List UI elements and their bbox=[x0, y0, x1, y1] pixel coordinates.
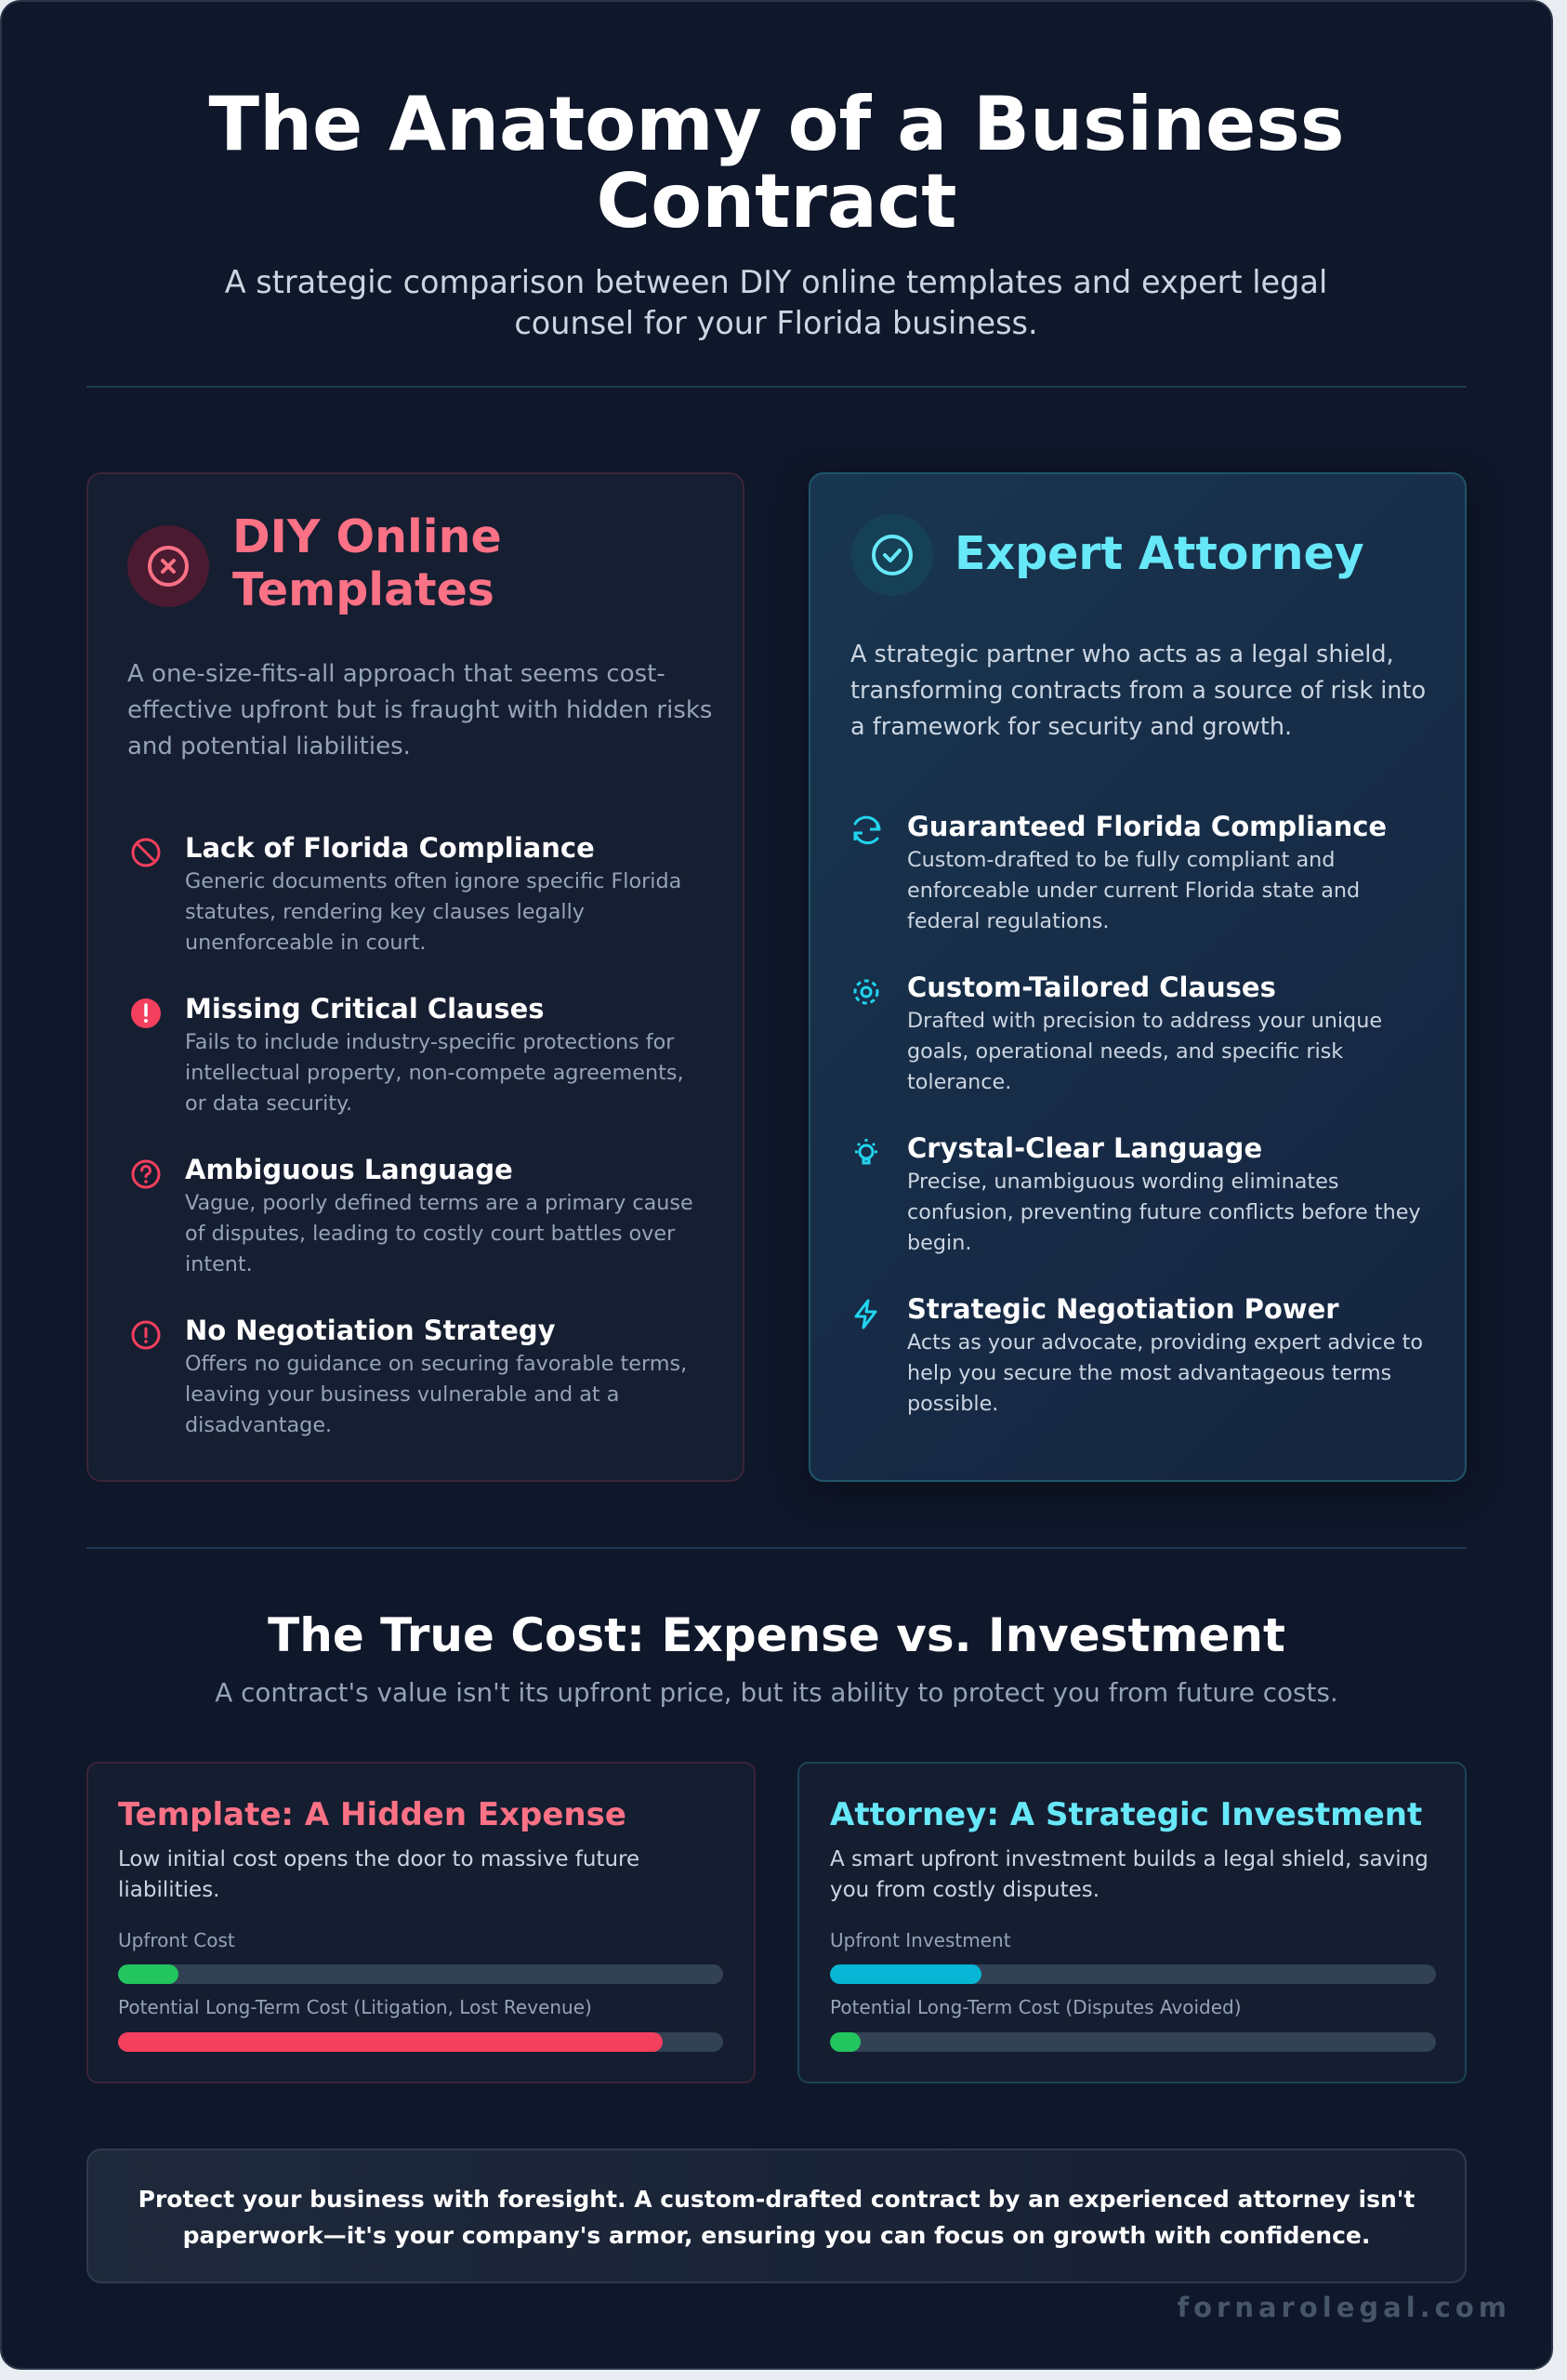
title: The Anatomy of a Business bbox=[209, 81, 1344, 167]
heading: attorney investment: Attorney: A Strategic Investment bbox=[830, 1796, 1422, 1833]
icon: bulb bbox=[855, 1139, 877, 1164]
callout: Protect your business with foresight. A custom-drafted contract by an experienced attorney isn't bbox=[138, 2186, 1415, 2213]
item: lack of compliance: Lack of Florida Compliance bbox=[185, 832, 595, 864]
section title: true cost: The True Cost: Expense vs. Investment bbox=[268, 1608, 1285, 1662]
item: ambiguous bbox=[185, 1154, 693, 1276]
heading: DIY: Templates bbox=[232, 563, 494, 616]
item: custom clauses: Custom-Tailored Clauses bbox=[907, 972, 1276, 1003]
footer: brand: fornarolegal.com bbox=[1177, 2292, 1511, 2323]
item: guaranteed compliance: Guaranteed Florida Compliance bbox=[907, 811, 1387, 842]
title bbox=[208, 81, 1344, 245]
item: custom clauses: Drafted with precision to address your unique goals, operational needs, and specific risk tolerance. bbox=[907, 1009, 1382, 1094]
icon: check circle bbox=[851, 514, 933, 596]
icon: refresh bbox=[853, 816, 881, 844]
item: clear language: Crystal-Clear Language bbox=[907, 1132, 1262, 1164]
item: guaranteed compliance: Custom-drafted to be fully compliant and enforceable under current Florida state and federal regulations. bbox=[907, 848, 1360, 933]
item: clear language: Precise, unambiguous wording eliminates confusion, preventing future conflicts before they begin. bbox=[907, 1170, 1421, 1255]
item: guaranteed compliance bbox=[907, 811, 1387, 933]
heading: DIY bbox=[232, 510, 502, 616]
card: template expense bbox=[86, 1762, 756, 2083]
item: custom clauses bbox=[907, 972, 1382, 1094]
heading: DIY: DIY Online bbox=[232, 510, 502, 563]
subtitle bbox=[225, 264, 1327, 341]
text: expert description: A strategic partner who acts as a legal shield, transforming contracts from a source of risk into a framework for security and growth. bbox=[850, 641, 1426, 741]
text: Low initial cost opens the door to massive future liabilities. bbox=[118, 1847, 639, 1902]
text: DIY description: A one-size-fits-all approach that seems cost-effective upfront but is fraught with hidden risks and potential liabilities. bbox=[127, 660, 712, 760]
subtitle: A strategic comparison between DIY online templates and expert legal bbox=[225, 264, 1327, 300]
subtitle: counsel for your Florida business. bbox=[514, 305, 1038, 341]
panel: expert attorney bbox=[809, 472, 1467, 1482]
card: attorney investment bbox=[797, 1762, 1467, 2083]
item: lack of compliance: Generic documents often ignore specific Florida statutes, rendering key clauses legally unenforceable in court. bbox=[185, 869, 681, 955]
panel: DIY templates bbox=[86, 472, 744, 1482]
item: no negotiation: Offers no guidance on securing favorable terms, leaving your business vulnerable and at a disadvantage. bbox=[185, 1352, 687, 1437]
text: A smart upfront investment builds a legal shield, saving you from costly disputes. bbox=[830, 1847, 1429, 1902]
item: missing clauses: Fails to include industry-specific protections for intellectual property, non-compete agreements, or data security. bbox=[185, 1030, 684, 1116]
item: no negotiation: No Negotiation Strategy bbox=[185, 1315, 556, 1346]
section subtitle: A contract's value isn't its upfront price, but its ability to protect you from future costs. bbox=[215, 1677, 1338, 1708]
icon: alert filled bbox=[131, 998, 161, 1028]
icon: ban bbox=[132, 839, 160, 866]
icon: bolt bbox=[854, 1300, 877, 1329]
item: negotiation power: Acts as your advocate, providing expert advice to help you secure the most advantageous terms possible. bbox=[907, 1330, 1423, 1416]
bar: long-term cost: Potential Long-Term Cost (Litigation, Lost Revenue) bbox=[118, 1996, 592, 2018]
heading: expert: Expert Attorney bbox=[955, 527, 1364, 580]
bar: upfront investment: Upfront Investment bbox=[830, 1929, 1011, 1951]
icon: question bbox=[132, 1160, 160, 1188]
item: lack of compliance bbox=[185, 832, 681, 955]
bar: disputes avoided: Potential Long-Term Cost (Disputes Avoided) bbox=[830, 1996, 1242, 2018]
title: Contract bbox=[597, 158, 956, 245]
heading: template expense: Template: A Hidden Expense bbox=[118, 1796, 626, 1833]
item: negotiation power: Strategic Negotiation Power bbox=[907, 1293, 1339, 1325]
callout: paperwork—it's your company's armor, ensuring you can focus on growth with confidence. bbox=[183, 2222, 1370, 2249]
item: clear language bbox=[907, 1132, 1421, 1255]
item: missing clauses bbox=[185, 993, 684, 1116]
icon: alert outline bbox=[132, 1320, 160, 1350]
item: ambiguous: Vague, poorly defined terms are a primary cause of disputes, leading to costly court battles over intent. bbox=[185, 1191, 693, 1276]
icon: x circle bbox=[127, 525, 209, 607]
icon: gear bbox=[853, 980, 879, 1004]
callout bbox=[86, 2149, 1467, 2283]
item: missing clauses: Missing Critical Clauses bbox=[185, 993, 545, 1025]
bar: upfront cost: Upfront Cost bbox=[118, 1929, 235, 1951]
item: negotiation power bbox=[907, 1293, 1423, 1416]
item: ambiguous: Ambiguous Language bbox=[185, 1154, 513, 1185]
item: no negotiation bbox=[185, 1315, 687, 1437]
